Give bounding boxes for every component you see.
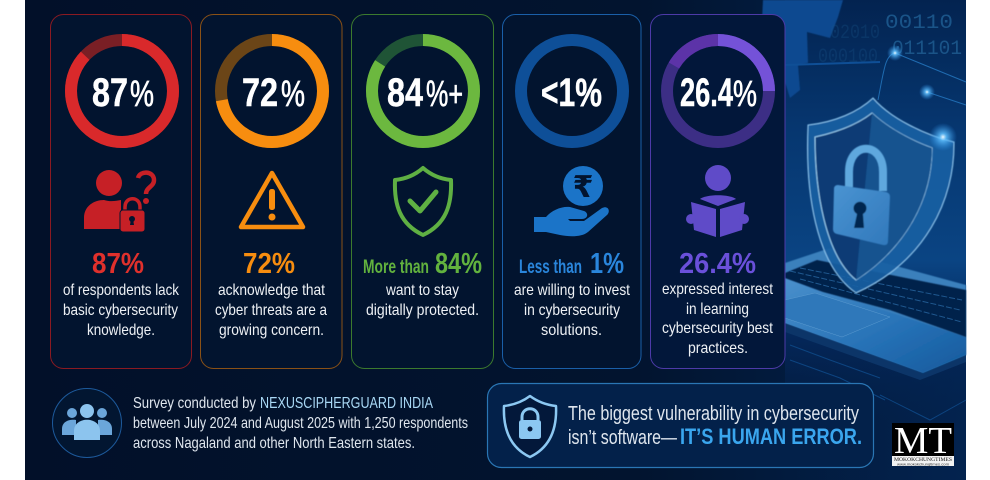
stat: more than 84%	[363, 248, 482, 280]
description: expressed interest	[662, 281, 773, 298]
donut value: %	[733, 73, 757, 114]
callout: human error	[488, 384, 874, 468]
icon: warning triangle	[241, 173, 303, 227]
survey description text	[133, 395, 468, 452]
callout text: IT’S HUMAN ERROR.	[680, 424, 862, 449]
illustration: laptop, shield and padlock	[762, 0, 966, 420]
light flare	[887, 45, 957, 151]
survey description text: Survey conducted by	[133, 395, 256, 412]
binary code digits: 000100	[818, 46, 878, 69]
donut value: %	[130, 73, 154, 114]
stat: more than 84%: More than	[363, 257, 429, 278]
donut value: 72	[242, 71, 278, 115]
binary code digits: 02010	[830, 22, 880, 45]
donut value: 26.4	[680, 71, 734, 115]
donut value: %+	[426, 73, 463, 114]
donut value: %	[281, 73, 305, 114]
panel: 84% want protection	[352, 14, 494, 368]
donut value: <1%	[541, 71, 602, 115]
description: basic cybersecurity	[63, 302, 178, 319]
description: solutions.	[541, 322, 602, 339]
donut chart: 87%	[71, 40, 173, 142]
logo: Mokokchung Times: www.mokokchungtimes.com	[897, 462, 949, 466]
description: of respondents lack	[63, 282, 180, 299]
donut value	[387, 71, 463, 115]
binary code digits	[818, 12, 962, 69]
description	[366, 282, 479, 319]
map shape	[762, 0, 843, 98]
palm rest	[785, 278, 966, 373]
donut chart: 26.4%	[667, 40, 769, 142]
icon: shield with padlock	[504, 396, 556, 457]
description: practices.	[688, 340, 748, 357]
padlock	[833, 149, 890, 245]
keyboard keys	[790, 268, 962, 322]
description: want to stay	[385, 282, 459, 299]
description: in learning	[686, 301, 749, 318]
binary code digits: 011101	[892, 38, 962, 61]
panel: 87% lack knowledge	[50, 14, 192, 368]
description	[63, 282, 180, 339]
binary code digits: 00110	[885, 12, 953, 35]
description: growing concern.	[219, 322, 324, 339]
trackpad	[785, 293, 890, 337]
circuit lines	[785, 53, 966, 105]
stat: less than 1%: Less than	[519, 257, 582, 278]
stat: 87%: 87%	[92, 248, 144, 280]
logo: Mokokchung Times: MT	[894, 420, 952, 462]
icon: person reading a book	[686, 165, 749, 237]
keyboard	[785, 260, 966, 337]
description: in cybersecurity	[524, 302, 620, 319]
stat: less than 1%: 1%	[590, 248, 624, 280]
description: cyber threats are a	[215, 302, 327, 319]
stat: more than 84%: 84%	[435, 248, 482, 280]
description: are willing to invest	[514, 282, 630, 299]
logo: Mokokchung Times: MOKOKCHUNGTIMES	[894, 458, 952, 463]
description: knowledge.	[87, 322, 155, 339]
description: cybersecurity best	[662, 320, 773, 337]
icon: hand holding rupee coin: ₹	[573, 170, 593, 205]
icon: hand holding rupee coin	[534, 166, 609, 236]
description: acknowledge that	[218, 282, 325, 299]
donut chart: 72%	[221, 40, 323, 142]
survey description text: NEXUSCIPHERGUARD INDIA	[260, 395, 433, 412]
stat: less than 1%	[519, 248, 624, 280]
icon: person with padlock and question mark	[84, 170, 154, 232]
stat: 72%: 72%	[243, 248, 295, 280]
stat: 26.4%: 26.4%	[679, 248, 756, 280]
circuit traces below laptop	[790, 345, 966, 420]
laptop front edge	[785, 323, 966, 380]
callout text	[568, 403, 862, 449]
description	[514, 282, 630, 339]
laptop base	[785, 248, 966, 373]
callout text: isn’t software—	[568, 427, 677, 449]
panel: 26.4% interested in learning	[650, 14, 785, 368]
description	[215, 282, 327, 339]
panel: under 1% would invest	[502, 14, 641, 368]
survey description text: across Nagaland and other North Eastern states.	[133, 435, 415, 452]
donut chart: under 1%	[521, 40, 623, 142]
panel: 72% threats concern	[200, 14, 342, 368]
icon: survey respondents group	[52, 388, 122, 458]
donut value: 84	[387, 71, 424, 115]
icon: shield with check mark	[395, 168, 451, 235]
description: digitally protected.	[366, 302, 479, 319]
survey description text: between July 2024 and August 2025 with 1,250 respondents	[133, 415, 468, 432]
callout text: The biggest vulnerability in cybersecurity	[568, 403, 859, 425]
donut chart: 84%	[372, 40, 474, 142]
donut value: 87	[92, 71, 128, 115]
shield	[808, 98, 954, 293]
description	[662, 281, 773, 357]
